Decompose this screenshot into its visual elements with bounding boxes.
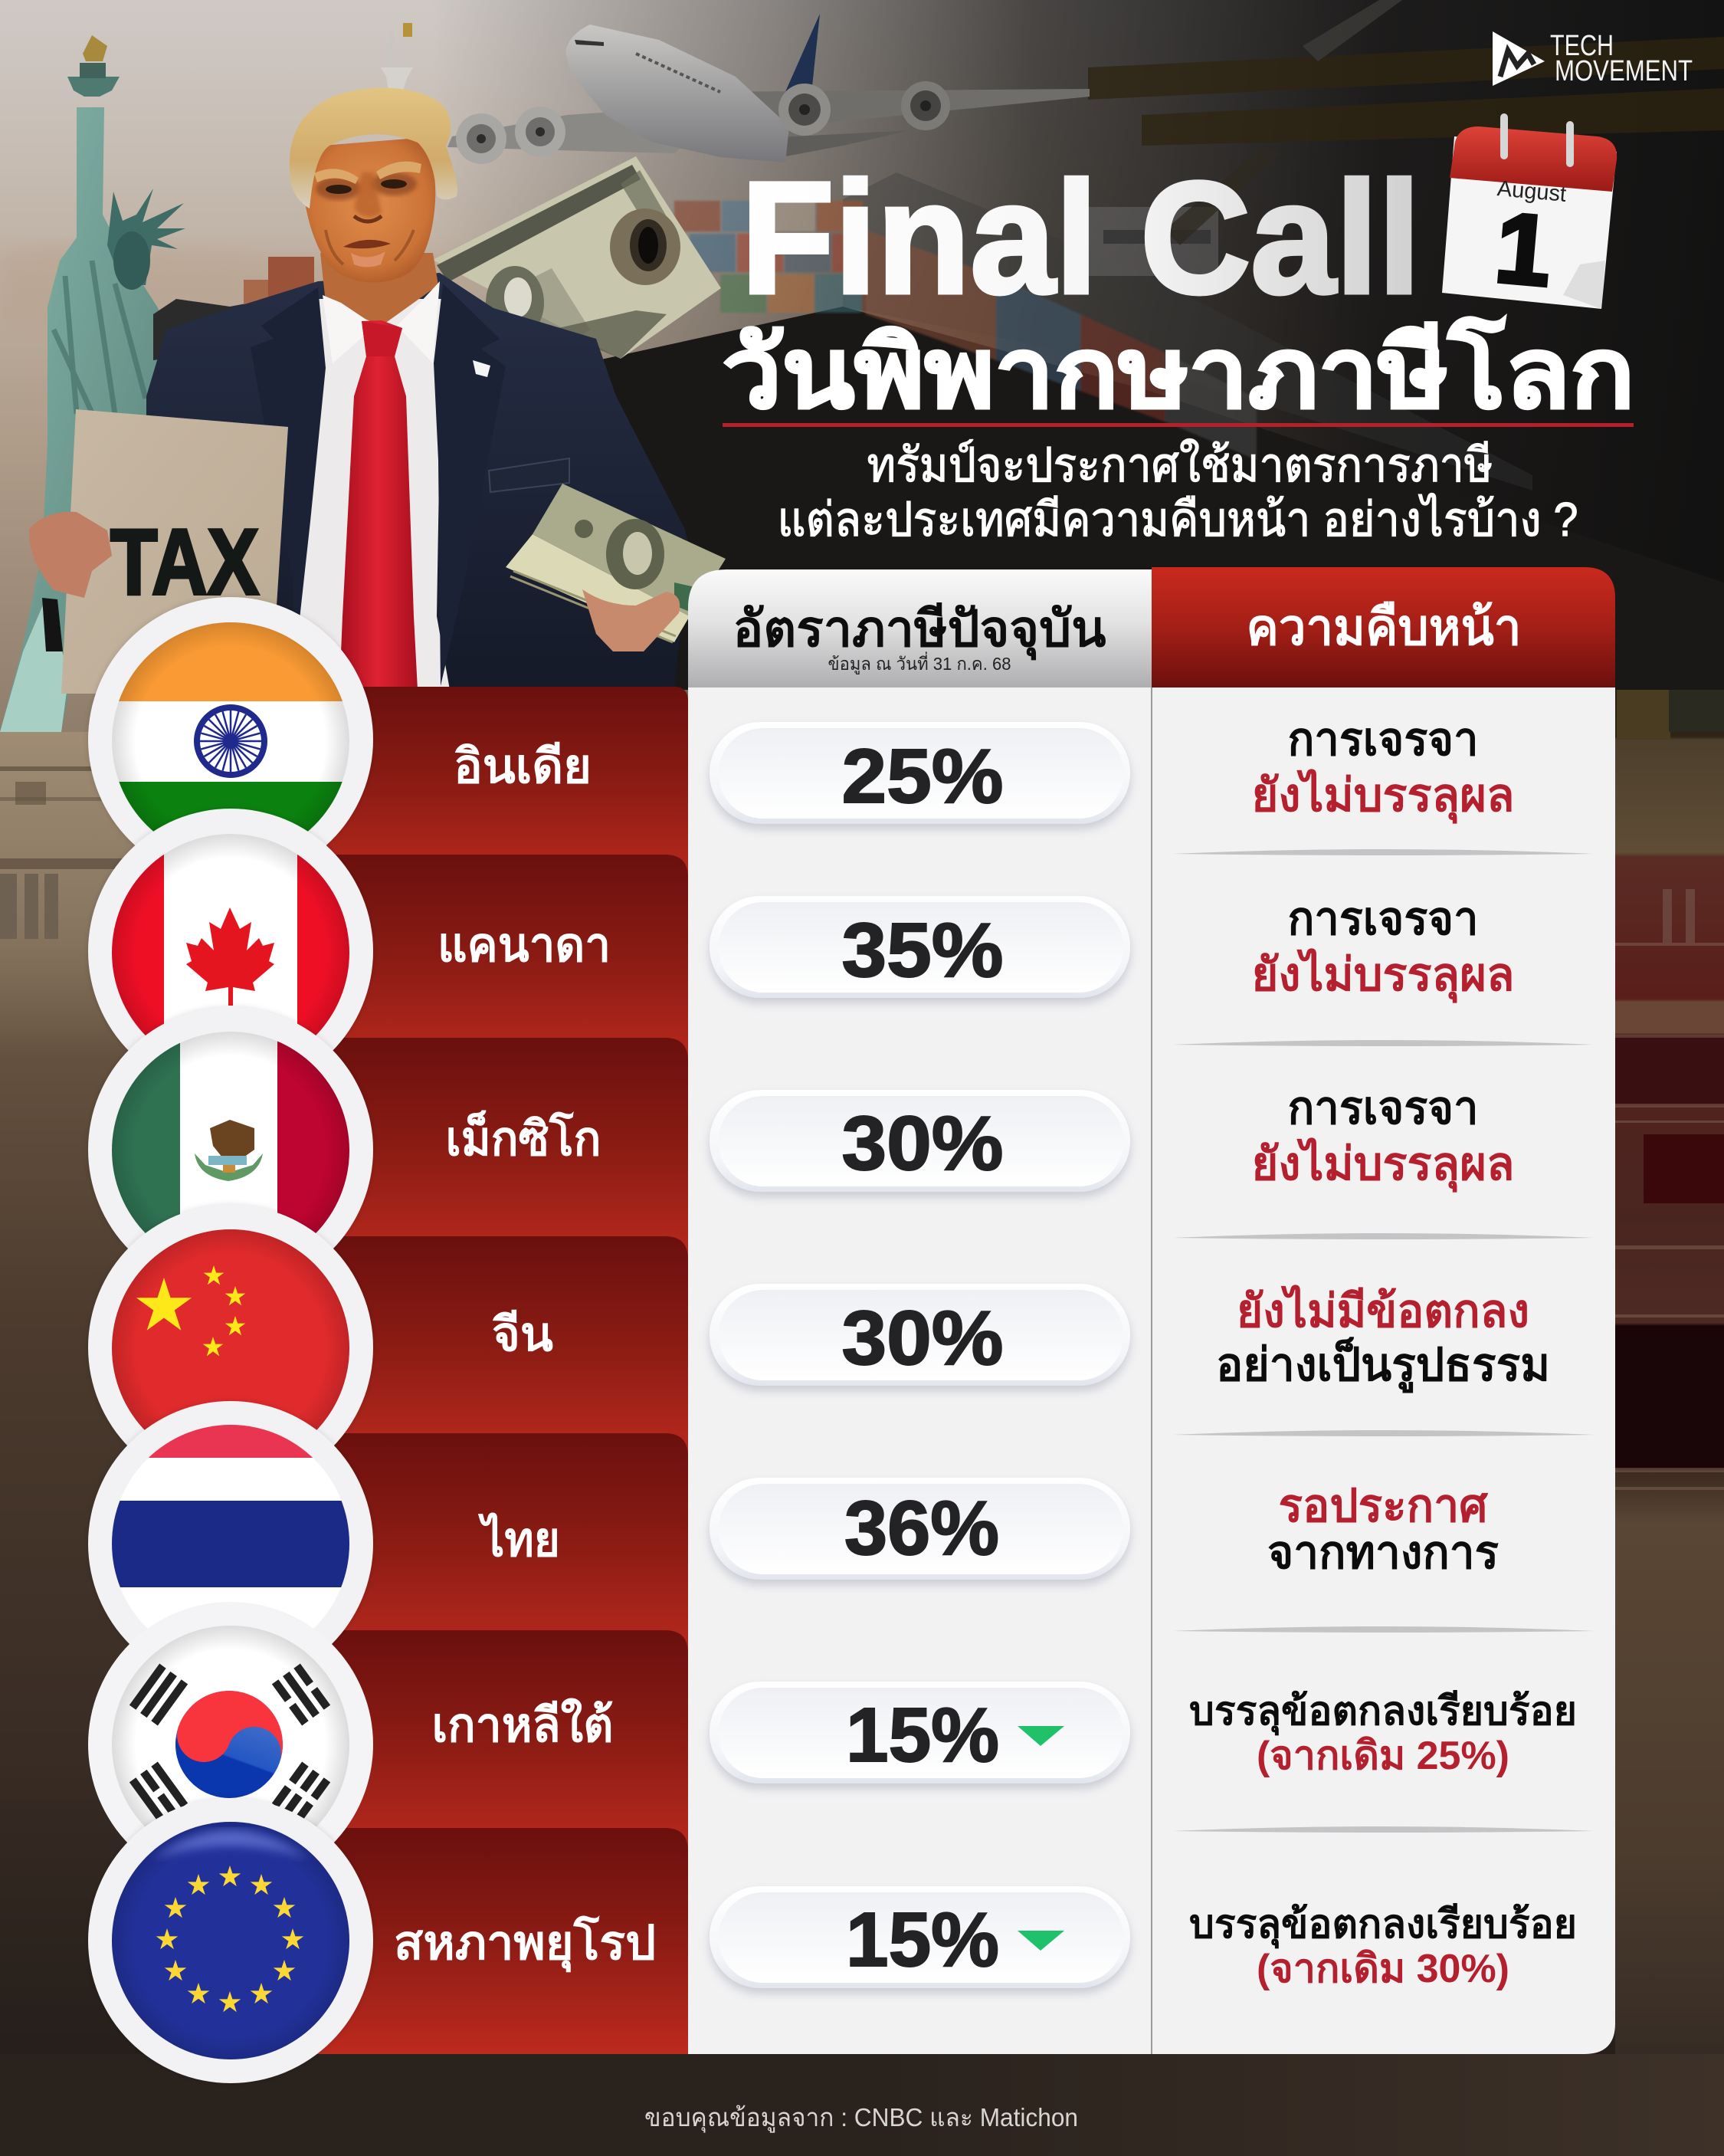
status: European Union: บรรลุข้อตกลงเรียบร้อย — [1189, 1902, 1577, 1949]
taegeuk — [160, 1675, 298, 1813]
face — [303, 138, 435, 282]
rate pill: European Union — [710, 1886, 1130, 1988]
rate pill: Canada — [710, 896, 1130, 998]
status: South Korea — [1189, 1689, 1577, 1778]
down arrow — [1018, 1726, 1064, 1746]
country names: อินเดีย — [454, 740, 592, 793]
status: European Union — [1189, 1902, 1577, 1991]
status: Mexico: ยังไม่บรรลุผล — [1252, 1137, 1514, 1193]
status: South Korea: บรรลุข้อตกลงเรียบร้อย — [1189, 1689, 1577, 1736]
country names: ไทย — [477, 1512, 560, 1567]
trigrams — [129, 1663, 330, 1824]
suit jacket — [146, 273, 690, 690]
status: China — [1216, 1284, 1550, 1393]
country names: สหภาพยุโรป — [394, 1915, 656, 1972]
hand — [582, 589, 680, 651]
country names: เม็กซิโก — [446, 1110, 601, 1166]
flag: Mexico — [88, 1006, 374, 1249]
flag: Canada — [87, 808, 374, 1050]
flag: India — [87, 596, 373, 846]
rate pill: Thailand — [710, 1478, 1130, 1580]
background: container ship — [598, 172, 1724, 690]
statue of liberty — [0, 35, 185, 1058]
calendar day: 1 — [1491, 191, 1556, 307]
logo — [1493, 30, 1693, 87]
stars — [156, 1866, 303, 2012]
calendar icon — [1442, 113, 1617, 309]
calendar month: August — [1496, 176, 1567, 207]
rate pill: Canada: 35% — [841, 907, 1004, 993]
flag: South Korea — [88, 1602, 373, 1887]
TAX sign with hand — [29, 409, 288, 694]
status: China: ยังไม่มีข้อตกลง — [1237, 1284, 1529, 1337]
status: China: อย่างเป็นรูปธรรม — [1216, 1337, 1550, 1393]
background: small roofs and containers beside the figure — [153, 257, 329, 360]
title: Final Call — [741, 149, 1421, 327]
tie — [339, 320, 418, 690]
pedestal — [0, 732, 138, 1058]
rate pill: Mexico — [710, 1090, 1130, 1192]
source credit: ขอบคุณข้อมูลจาก : CNBC และ Matichon — [644, 2103, 1078, 2133]
status: Mexico: การเจรจา — [1287, 1082, 1479, 1134]
panel: table body — [688, 687, 1615, 2054]
crown and head — [107, 189, 185, 290]
sign text: TAX — [110, 510, 259, 614]
logo: MOVEMENT — [1555, 55, 1693, 87]
status: Canada — [1252, 893, 1514, 1003]
stars — [136, 1265, 245, 1356]
data date note: ข้อมูล ณ วันที่ 31 ก.ค. 68 — [828, 651, 1011, 674]
status: Thailand: รอประกาศ — [1278, 1480, 1488, 1531]
burnt dollar bill — [433, 156, 721, 360]
rate pill: China — [710, 1284, 1130, 1386]
status: European Union: (จากเดิม 30%) — [1257, 1947, 1509, 1991]
rate pill: European Union: 15% — [846, 1897, 999, 1983]
subtitle: แต่ละประเทศมีความคืบหน้า อย่างไรบ้าง ? — [777, 493, 1578, 546]
status: India: ยังไม่บรรลุผล — [1252, 768, 1514, 824]
country names — [394, 740, 656, 1972]
status: India — [1252, 714, 1514, 824]
background: ship mast — [381, 23, 413, 90]
status: Thailand — [1267, 1480, 1499, 1578]
logo: TECH — [1550, 30, 1614, 62]
row bands — [230, 687, 688, 2054]
header: progress: ความคืบหน้า — [1246, 599, 1522, 655]
subtitle — [777, 438, 1578, 546]
emblem — [195, 1120, 263, 1181]
header: current tax rate — [688, 569, 1152, 687]
figure in suit — [146, 88, 690, 690]
status: Thailand: จากทางการ — [1267, 1527, 1499, 1578]
rate pill: Thailand: 36% — [844, 1485, 999, 1571]
neck — [320, 253, 438, 326]
country names: จีน — [492, 1308, 553, 1361]
collar — [323, 281, 440, 363]
status: Canada: การเจรจา — [1287, 893, 1479, 944]
subtitle: ทรัมป์จะประกาศใช้มาตรการภาษี — [867, 438, 1493, 492]
pin and pocket — [473, 360, 569, 492]
rate pill: Mexico: 30% — [841, 1101, 1004, 1186]
rate pill: India: 25% — [841, 733, 1004, 819]
status: South Korea: (จากเดิม 25%) — [1257, 1734, 1509, 1778]
title — [722, 149, 1635, 428]
status: Mexico — [1252, 1082, 1514, 1193]
logo mark — [1493, 31, 1545, 86]
country names: เกาหลีใต้ — [432, 1698, 613, 1752]
money stack and hand — [506, 484, 726, 651]
down arrow — [1018, 1931, 1064, 1951]
rate pill: China: 30% — [841, 1295, 1004, 1381]
country names: แคนาดา — [438, 919, 611, 972]
status dividers — [1172, 849, 1594, 1833]
thai headline: วันพิพากษาภาษีโลก — [722, 316, 1635, 428]
flag: European Union — [88, 1798, 373, 2083]
rate pill: South Korea: 15% — [846, 1692, 999, 1778]
rate pill: South Korea — [710, 1682, 1130, 1784]
status: India: การเจรจา — [1287, 714, 1479, 765]
header: progress — [1152, 567, 1615, 687]
maple leaf — [186, 907, 274, 1006]
airplane — [447, 14, 1090, 164]
hair — [290, 88, 457, 208]
column divider — [1151, 687, 1152, 2054]
hand — [29, 512, 112, 598]
shirt — [295, 299, 450, 690]
lapels — [251, 284, 506, 686]
rate pill: India — [710, 722, 1130, 824]
flag: Thailand — [88, 1400, 374, 1644]
flag: China — [88, 1205, 373, 1490]
background: port crane — [1088, 0, 1724, 245]
torch — [67, 35, 120, 97]
header: current tax rate: อัตราภาษีปัจจุบัน — [733, 600, 1106, 661]
status: Canada: ยังไม่บรรลุผล — [1252, 947, 1514, 1003]
